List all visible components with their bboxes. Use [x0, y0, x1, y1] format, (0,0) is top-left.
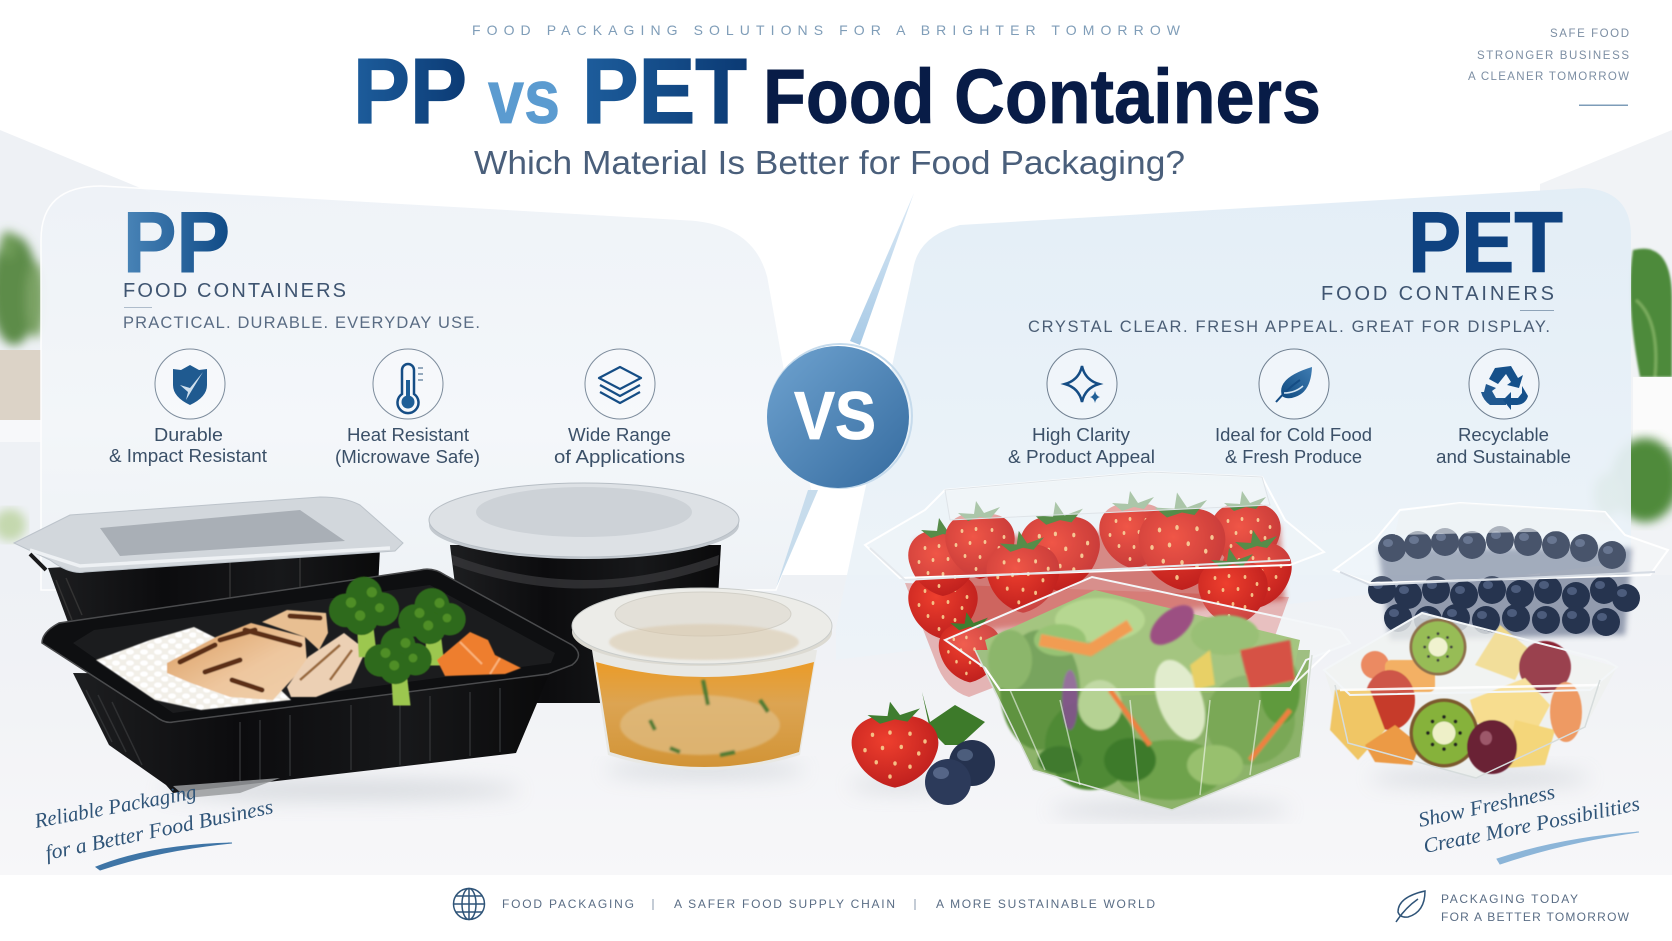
- label: high clarity: [1008, 425, 1155, 467]
- label: durable: & Impact Resistant: [109, 446, 267, 466]
- footer text: A MORE SUSTAINABLE WORLD: [936, 897, 1155, 911]
- product: PP soup tub: [572, 588, 832, 770]
- label: ideal for cold food: Ideal for Cold Food: [1215, 425, 1372, 445]
- handwritten note left: Reliable Packaging: [32, 779, 198, 833]
- title: PP: [353, 39, 467, 143]
- label: durable: [109, 425, 267, 466]
- PP heading block: PRACTICAL. DURABLE. EVERYDAY USE.: [123, 314, 480, 332]
- label: high clarity: High Clarity: [1032, 425, 1130, 445]
- title: Food Containers: [763, 54, 1321, 140]
- PET heading block: PET: [1408, 195, 1563, 291]
- panel: PP background: [41, 186, 812, 590]
- footer text: A SAFER FOOD SUPPLY CHAIN: [674, 897, 895, 911]
- product shadows: [160, 762, 1590, 818]
- top tagline: FOOD PACKAGING SOLUTIONS FOR A BRIGHTER TOMORROW: [472, 22, 1181, 38]
- background pot left: [0, 350, 41, 420]
- panel: PET background: [836, 188, 1631, 660]
- top right tagline: STRONGER BUSINESS: [1477, 50, 1629, 62]
- label: heat resistant: [335, 425, 480, 467]
- label: heat resistant: (Microwave Safe): [335, 447, 480, 467]
- title: vs: [488, 55, 560, 140]
- icon: sparkle: [1047, 349, 1117, 419]
- background pot right: [1633, 377, 1672, 447]
- label: durable: Durable: [154, 425, 223, 445]
- icon: shield: [155, 349, 225, 419]
- background plant left: [0, 231, 46, 345]
- label: high clarity: & Product Appeal: [1008, 447, 1155, 467]
- icon: thermometer: [373, 349, 443, 419]
- background wall left: [0, 130, 150, 600]
- top right tagline: [1468, 28, 1629, 106]
- icon: layers: [585, 349, 655, 419]
- label: recyclable: and Sustainable: [1436, 447, 1571, 467]
- handwritten note right: Show Freshness: [1416, 780, 1557, 832]
- product: PP rectangular box back: [14, 497, 403, 690]
- label: ideal for cold food: & Fresh Produce: [1225, 447, 1362, 467]
- label: heat resistant: Heat Resistant: [347, 425, 469, 445]
- background shelf left: [0, 420, 41, 442]
- subtitle: Which Material Is Better for Food Packaging?: [474, 144, 1185, 181]
- PP heading block: [123, 195, 480, 332]
- handwritten note right: Create More Possibilities: [1421, 791, 1642, 858]
- top right tagline: A CLEANER TOMORROW: [1468, 71, 1629, 83]
- product: PET blueberry clamshell: [1334, 503, 1668, 640]
- background plant right bottom: [1594, 438, 1672, 522]
- footer slogan: FOR A BETTER TOMORROW: [1441, 910, 1630, 924]
- VS badge: [767, 344, 912, 488]
- label: wide range: Wide Range: [568, 425, 671, 445]
- product: PET fruit container: [1324, 613, 1617, 778]
- PET heading block: CRYSTAL CLEAR. FRESH APPEAL. GREAT FOR DISPLAY.: [1028, 318, 1550, 336]
- PP heading block: FOOD CONTAINERS: [123, 280, 346, 302]
- top right tagline: SAFE FOOD: [1550, 28, 1629, 40]
- background wall right: [1540, 130, 1672, 600]
- label: wide range: [554, 425, 685, 467]
- title: PET: [582, 39, 747, 143]
- background plant right top: [1630, 249, 1672, 377]
- PP heading block: PP: [123, 195, 230, 291]
- product: PET strawberry clamshell: [865, 472, 1324, 697]
- footer background: [0, 875, 1672, 941]
- product: PET salad container: [945, 577, 1350, 810]
- VS badge: VS: [794, 378, 876, 454]
- diagonal divider lower: [776, 490, 818, 588]
- icon: leaf: [1259, 349, 1329, 419]
- footer slogan: [1441, 892, 1630, 924]
- loose strawberry and blueberries: [852, 692, 995, 805]
- label: recyclable: Recyclable: [1458, 425, 1549, 445]
- product: PP round tub back: [429, 483, 739, 703]
- icon: recycle: [1469, 349, 1539, 419]
- PET heading block: [1028, 195, 1563, 336]
- footer slogan: PACKAGING TODAY: [1441, 892, 1578, 906]
- label: ideal for cold food: [1215, 425, 1372, 467]
- icon: globe: [454, 888, 484, 920]
- icon: footer leaf: [1396, 891, 1425, 922]
- floor: [0, 575, 1672, 875]
- background blurred greenery left: [0, 509, 26, 541]
- PET heading block: FOOD CONTAINERS: [1321, 283, 1554, 305]
- diagonal divider upper: [850, 193, 914, 345]
- handwritten note left: for a Better Food Business: [43, 794, 275, 865]
- footer text: FOOD PACKAGING: [502, 897, 634, 911]
- label: wide range: of Applications: [554, 447, 685, 467]
- footer text: [502, 897, 1155, 911]
- product: PP black meal tray with food: [42, 569, 578, 798]
- title: [353, 39, 1321, 143]
- label: recyclable: [1436, 425, 1571, 467]
